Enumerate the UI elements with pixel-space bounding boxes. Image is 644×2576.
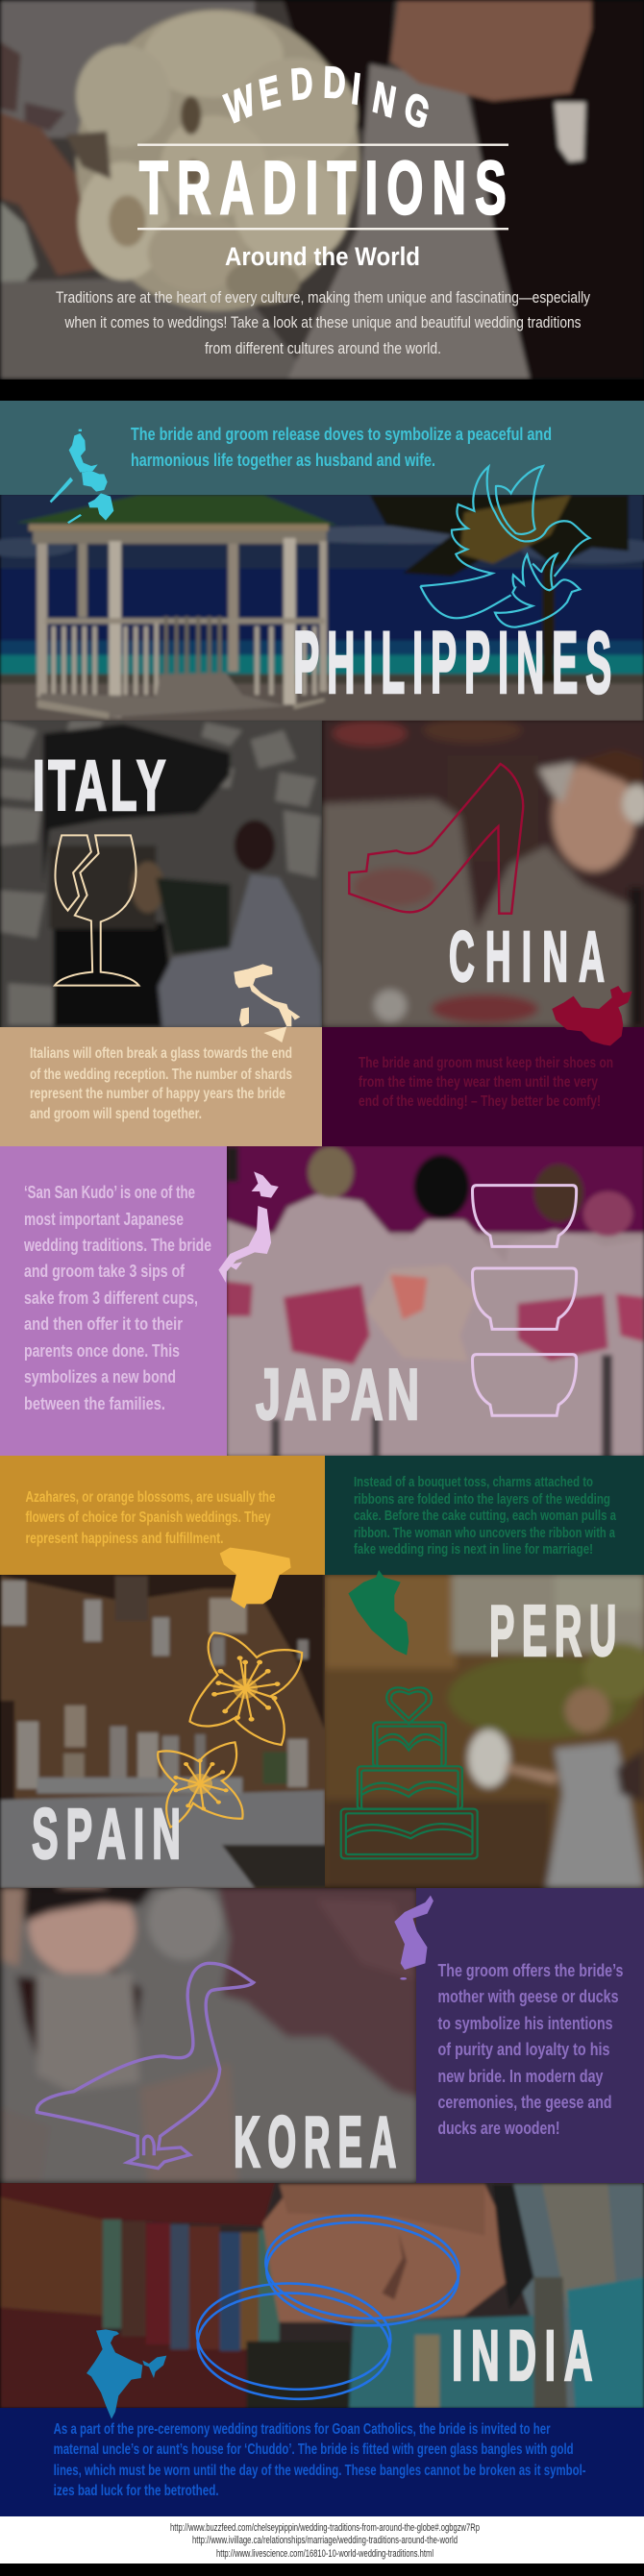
text background: indigo <box>416 1888 644 2183</box>
heading: Japan: JAPAN <box>256 1354 423 1435</box>
text: Italy: represent the number of happy years the bride <box>30 1086 285 1102</box>
text: source links <box>170 2522 480 2560</box>
divider bottom <box>137 228 508 230</box>
icon: Italy map <box>234 964 300 1043</box>
heading: Italy: ITALY <box>33 746 169 825</box>
icon: high-heel shoe <box>349 764 523 914</box>
heading: Korea: KOREA <box>234 2101 404 2182</box>
text: Italy <box>30 1045 292 1122</box>
photo: smiling bride with veil <box>320 718 644 1031</box>
icon: orange blossoms <box>158 1632 302 1828</box>
text: Japan: sake from 3 different cups, <box>24 1288 198 1308</box>
photo: candlelit hall with tables <box>0 1573 329 1890</box>
text: China <box>359 1055 613 1110</box>
text background: dark green <box>325 1456 644 1575</box>
photo: women in kimonos with parasols <box>226 1143 644 1458</box>
icon: Korea map <box>394 1896 433 1980</box>
panel: India <box>0 2181 644 2516</box>
text background: navy <box>0 2408 644 2516</box>
icon: goose <box>37 1963 254 2169</box>
icon: bangles <box>192 2208 465 2404</box>
text background: plum <box>322 1027 644 1146</box>
panel: Spain text <box>0 1456 325 1608</box>
panel: Philippines <box>0 401 644 723</box>
text: Japan <box>23 1182 211 1413</box>
photo: bride with bouquet in forest <box>320 1573 644 1890</box>
divider top <box>137 144 508 146</box>
text: source links: http://www.buzzfeed.com/chelseypippin/wedding-traditions-from-around-the-globe#.ogbgzw7Rp <box>170 2522 480 2534</box>
icon: broken wine glass <box>55 835 138 986</box>
panel: Peru <box>320 1573 644 1890</box>
photo: Korean bride <box>0 1880 419 2184</box>
text background: tan <box>0 1027 322 1146</box>
text: Philippines: The bride and groom release doves to symbolize a peaceful and <box>131 425 552 444</box>
intro paragraph <box>56 289 591 357</box>
text: Korea: ducks are wooden! <box>438 2118 559 2138</box>
icon: Spain map <box>220 1548 291 1608</box>
text: Spain: represent happiness and fulfillment. <box>25 1531 223 1547</box>
text background: orchid <box>0 1146 227 1456</box>
intro paragraph: from different cultures around the world. <box>205 340 441 357</box>
icon: Japan map <box>218 1171 279 1283</box>
photo: joined hands with bangles <box>0 2181 644 2409</box>
text: Philippines: harmonious life together as husband and wife. <box>131 451 435 470</box>
panel: Spain <box>0 1573 329 1890</box>
text: Italy: and groom will spend together. <box>30 1106 202 1122</box>
text: source links: http://www.livescience.com/16810-10-world-wedding-traditions.html <box>216 2548 433 2560</box>
panel: China text <box>322 986 644 1146</box>
text: Japan: symbolizes a new bond <box>24 1366 176 1386</box>
text: India <box>54 2421 586 2499</box>
icon: Peru map <box>348 1570 409 1656</box>
icon: doves <box>420 466 589 627</box>
panel: Italy <box>0 718 325 1031</box>
panel: hero header <box>0 0 644 380</box>
text: Japan: most important Japanese <box>24 1209 184 1229</box>
text: Peru <box>354 1475 617 1558</box>
title: Wedding: WEDDING <box>221 58 434 140</box>
heading: Spain: SPAIN <box>32 1794 188 1874</box>
icon: sake cups <box>473 1186 577 1415</box>
text: Japan: and groom take 3 sips of <box>24 1261 186 1281</box>
panel: Korea <box>0 1880 644 2184</box>
text: Japan: parents once done. This <box>24 1340 180 1361</box>
text: India: izes bad luck for the betrothed. <box>54 2483 219 2499</box>
panel: China <box>320 718 644 1031</box>
photo: gazebo on the beach <box>0 493 644 723</box>
text: Japan: between the families. <box>24 1393 165 1413</box>
icon: China map <box>552 986 632 1045</box>
panel: Italy text <box>0 964 322 1146</box>
text: Korea <box>438 1960 623 2138</box>
panel: Japan <box>0 1143 644 1458</box>
hero photo: bride and groom holding hands with bouquet <box>0 0 644 380</box>
text: Spain: Azahares, or orange blossoms, are usually the <box>25 1489 276 1506</box>
icon: wedding cake <box>341 1687 478 1858</box>
panel: Peru text <box>325 1456 644 1656</box>
text background: amber <box>0 1456 325 1575</box>
panel: sources <box>0 2516 644 2564</box>
text: Italy: of the wedding reception. The number of shards <box>30 1067 292 1083</box>
subtitle: Around the World <box>225 242 420 271</box>
text: Japan: ‘San San Kudo’ is one of the <box>24 1182 195 1202</box>
icon: India map <box>87 2329 166 2419</box>
text: Italy: Italians will often break a glass towards the end <box>30 1045 292 1062</box>
text: Japan: wedding traditions. The bride <box>23 1235 211 1255</box>
text: Japan: and then offer it to their <box>24 1313 183 1334</box>
icon: Philippines map <box>50 429 113 524</box>
sources background <box>0 2516 644 2564</box>
text: Spain: flowers of choice for Spanish weddings. They <box>25 1509 271 1526</box>
text: Spain <box>25 1489 276 1547</box>
band: Philippines text background <box>0 401 644 495</box>
photo: bride by stone wall <box>0 718 325 1031</box>
text: source links: http://www.ivillage.ca/relationships/marriage/wedding-traditions-around-the-world <box>192 2535 458 2546</box>
text: Philippines <box>131 425 552 470</box>
